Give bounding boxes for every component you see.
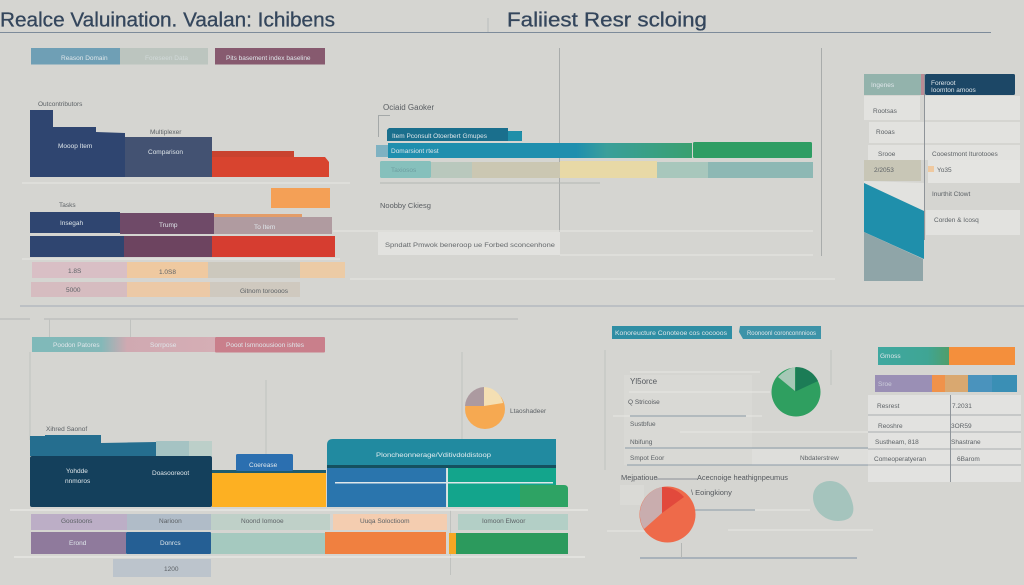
table strip: lower pastel rows (31, 514, 568, 577)
chart: horizontal teal and green bars: Ociaid Gaoker (383, 103, 434, 112)
panel: right table with teal shape: Yo35 (937, 167, 952, 174)
labels: teal tags (612, 326, 821, 339)
list: left text rows: Nbifung (630, 439, 653, 446)
list: left text rows: Q Stricoise (628, 399, 660, 406)
stacked bars: navy plum red: Insegah (60, 220, 84, 227)
legend: bottom left (32, 337, 325, 352)
note: chart caption (378, 201, 560, 255)
legend: bottom left: Pooot Ismnoousioon ishtes (226, 342, 305, 349)
table: values: 7.2031 (952, 403, 972, 410)
legend: top left (31, 48, 325, 64)
stacked bars: navy plum red (30, 202, 335, 257)
chart: horizontal teal and green bars: Item Pconsult Otoerbert Gmupes (392, 133, 488, 140)
panel: right table with teal shape (864, 74, 1020, 281)
bar chart: bottom stepped blocks: Yohdde (66, 468, 88, 475)
list: left text rows: Sustbfue (630, 421, 656, 428)
stacked bars: teal orange and purple: Gmoss (880, 353, 901, 360)
table strip: lower pastel rows: Iomoon Elwoor (482, 518, 526, 525)
stacked bars: teal orange and purple (875, 347, 1017, 392)
table: values: Comeoperatyeran (874, 456, 926, 463)
title: right heading: Faliiest Resr scloing (507, 10, 707, 32)
bar chart: stepped navy and red: Outcontributors (38, 101, 83, 108)
panel: right table with teal shape: Foreroot (931, 80, 956, 87)
stacked bars: navy plum red: Trump (159, 222, 178, 229)
table strip: lower pastel rows: Erond (69, 540, 87, 547)
note: chart caption: Spndatt Pmwok beneroop ue Forbed sconcenhone (385, 242, 555, 249)
bar chart: stepped navy and red: Mooop Item (58, 143, 92, 150)
chart annotation text (621, 473, 788, 497)
list: left text rows: Yl5orce (630, 377, 658, 386)
panel: right table with teal shape: Srooe (878, 151, 896, 158)
note: chart caption: Noobby Ckiesg (380, 201, 431, 210)
callout: orange block (271, 188, 330, 208)
list: left text rows: Smpot Eoor (630, 455, 665, 462)
stacked bars: teal orange and purple: Sroe (878, 381, 892, 388)
lines: lower right rules (607, 510, 873, 558)
chart annotation text: Acecnoige heathignpeumus (697, 473, 788, 482)
panel: right table with teal shape: Rooas (876, 129, 896, 136)
panel: right table with teal shape: Corden & Icosq (934, 217, 979, 224)
stacked bars: navy plum red: Tasks (59, 202, 76, 209)
bar chart: bottom stepped blocks: Xihred Saonof (46, 426, 87, 433)
bar chart: stepped navy and red: Multiplexer (150, 129, 182, 136)
table strip: pastel rows (31, 262, 345, 297)
pie chart: small orange (465, 387, 547, 429)
bar chart: stepped navy and red (30, 101, 329, 177)
chart: horizontal teal and green bars: Taxiosos (391, 167, 417, 174)
bar chart: bottom stepped blocks: nnmoros (65, 478, 91, 485)
table strip: pastel rows: 5000 (66, 287, 81, 294)
shape: teal blob (813, 481, 853, 521)
table strip: lower pastel rows: Goostoons (61, 518, 93, 525)
panel: right table with teal shape: Ingenes (871, 82, 895, 89)
table strip: pastel rows: Gitnom toroooos (240, 288, 289, 295)
pie chart: coral (620, 485, 696, 542)
stacked bars: navy plum red: To Item (254, 224, 275, 231)
bar chart: bottom stepped blocks: Doasooreoot (152, 470, 189, 477)
pie chart: green (772, 367, 820, 416)
bar chart: stepped navy and red: Comparison (148, 149, 183, 156)
table strip: lower pastel rows: Noond Iomooe (241, 518, 284, 525)
panel: right table with teal shape: Cooestmont Iturotooes (932, 151, 999, 158)
chart annotation text: Mejpatioue (621, 473, 658, 482)
table: values: Resrest (877, 403, 900, 410)
legend: bottom left: Poodon Patores (53, 342, 100, 349)
legend: top left: Foreseen Data (145, 55, 188, 62)
labels: teal tags: Roonoonl coronconnnioos (747, 330, 817, 337)
panel: right table with teal shape: Ioomton amoos (931, 87, 977, 94)
table: values: Reoshre (878, 423, 903, 430)
chart annotation text: \ Eoingkiony (691, 488, 732, 497)
table: values: Sustheam, 818 (875, 439, 919, 446)
list: left text rows: Nbdaterstrew (800, 455, 839, 462)
bar: yellow block with blue tab: Coerease (249, 462, 278, 469)
list: left text rows (613, 372, 870, 465)
table strip: lower pastel rows: Uuqa Soloctioom (360, 518, 410, 525)
table strip: pastel rows: 1.0S8 (159, 269, 176, 276)
table strip: pastel rows: 1.8S (68, 268, 82, 275)
title: left heading: Realce Valuination. Vaalan: Ichibens (0, 10, 335, 32)
chart: horizontal teal and green bars (376, 103, 813, 178)
labels: teal tags: Konoreucture Conoteoe cos cocooos (615, 330, 728, 337)
legend: top left: Reason Domain (61, 55, 108, 62)
pie chart: small orange: Ltaoshadeer (510, 408, 547, 415)
table strip: lower pastel rows: 1200 (164, 566, 179, 573)
bar: yellow block with blue tab (212, 454, 326, 507)
bar chart: teal header with blue and green: Ploncheonnerage/Vditivdoldistoop (376, 452, 491, 459)
bar chart: bottom stepped blocks (30, 426, 212, 507)
table: values: 3OR59 (951, 423, 972, 430)
chart: horizontal teal and green bars: Domarsiont rtest (391, 148, 439, 155)
table strip: lower pastel rows: Donrcs (160, 540, 181, 547)
legend: top left: Pits basement index baseline (226, 55, 311, 62)
table: values: 6Barom (957, 456, 980, 463)
panel: right table with teal shape: 2/2053 (874, 167, 894, 174)
table: values: Shastrane (951, 439, 981, 446)
legend: bottom left: Sorrpose (150, 342, 177, 349)
table: values (868, 395, 1021, 482)
panel: right table with teal shape: Inurthit Ctowt (932, 191, 970, 198)
bar chart: teal header with blue and green (327, 439, 568, 507)
table strip: lower pastel rows: Narioon (159, 518, 182, 525)
panel: right table with teal shape: Rootsas (873, 108, 898, 115)
